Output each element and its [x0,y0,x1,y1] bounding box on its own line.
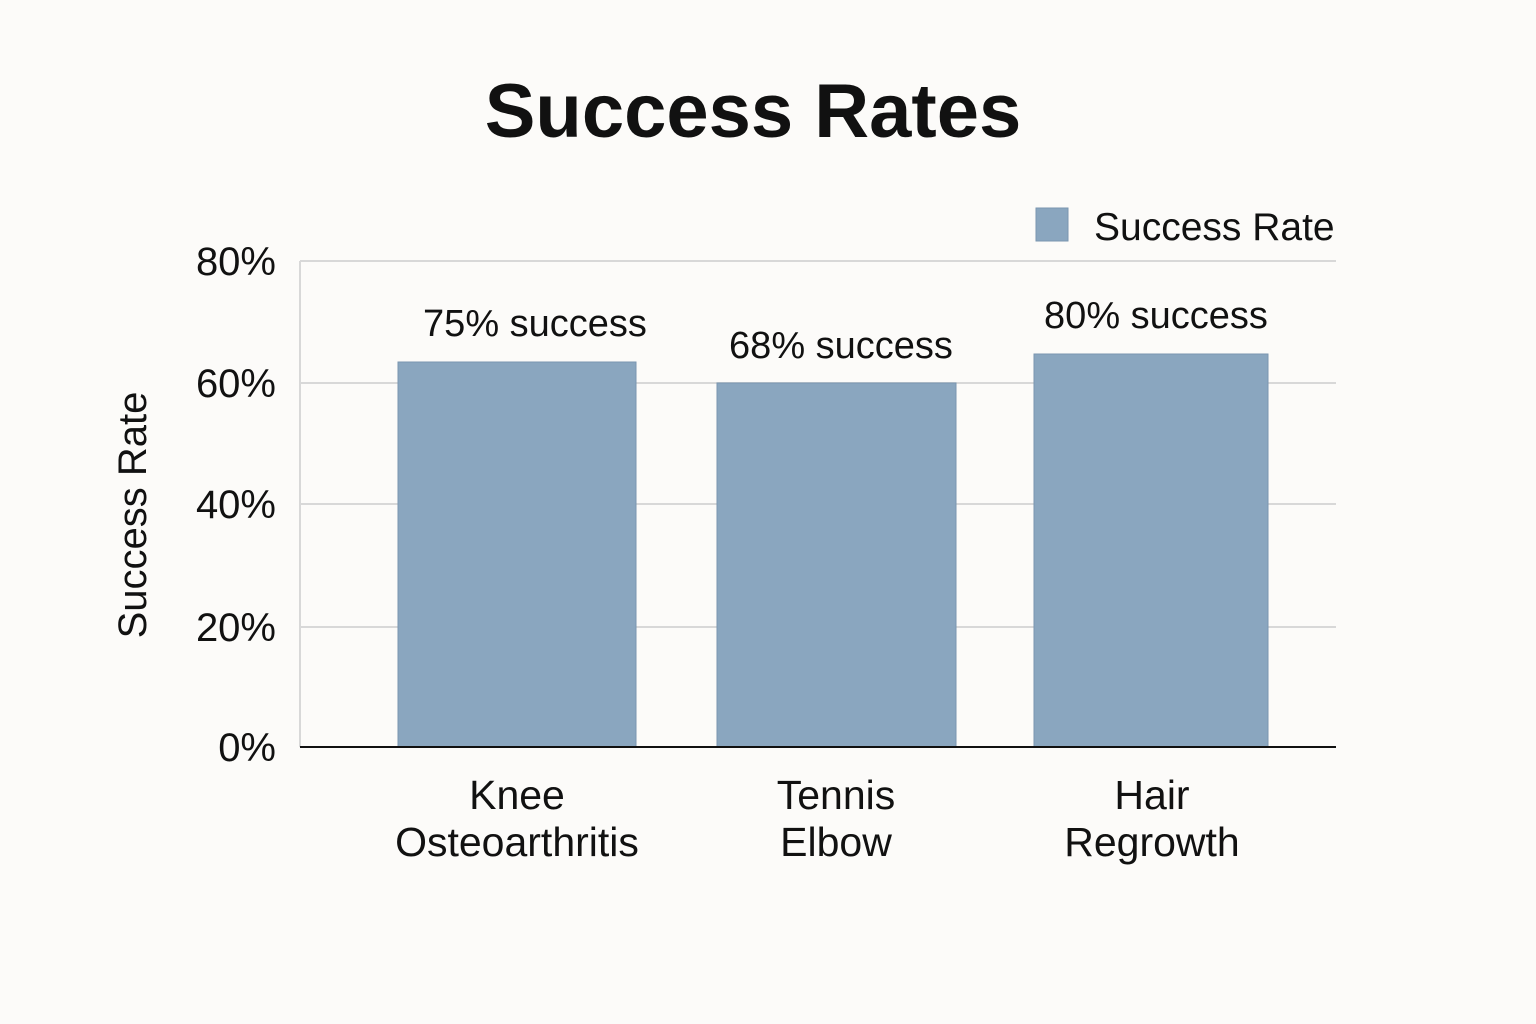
bar value labels [423,295,1268,367]
y axis tick labels: 20% [196,606,276,650]
category labels [395,772,1240,865]
bar value labels: 68% success [729,325,953,367]
title: Success Rates [485,69,1021,154]
y axis tick labels: 0% [218,726,276,770]
x axis [300,746,1336,748]
category labels: Regrowth [1064,819,1240,865]
category labels: Tennis [777,772,895,818]
category labels: Knee [469,772,565,818]
y axis tick labels: 80% [196,240,276,284]
bar value labels: 80% success [1044,295,1268,337]
bar value labels: 75% success [423,303,647,345]
bar: Knee Osteoarthritis [398,362,636,747]
y axis tick labels: 60% [196,362,276,406]
category labels: Hair [1114,772,1190,818]
category labels: Osteoarthritis [395,819,639,865]
y axis title: Success Rate [111,392,155,638]
legend: Success Rate [1094,206,1335,249]
bar: Hair Regrowth [1034,354,1268,747]
y axis tick labels [196,240,276,770]
category labels: Elbow [780,819,892,865]
bar: Tennis Elbow [717,383,956,747]
y axis tick labels: 40% [196,483,276,527]
